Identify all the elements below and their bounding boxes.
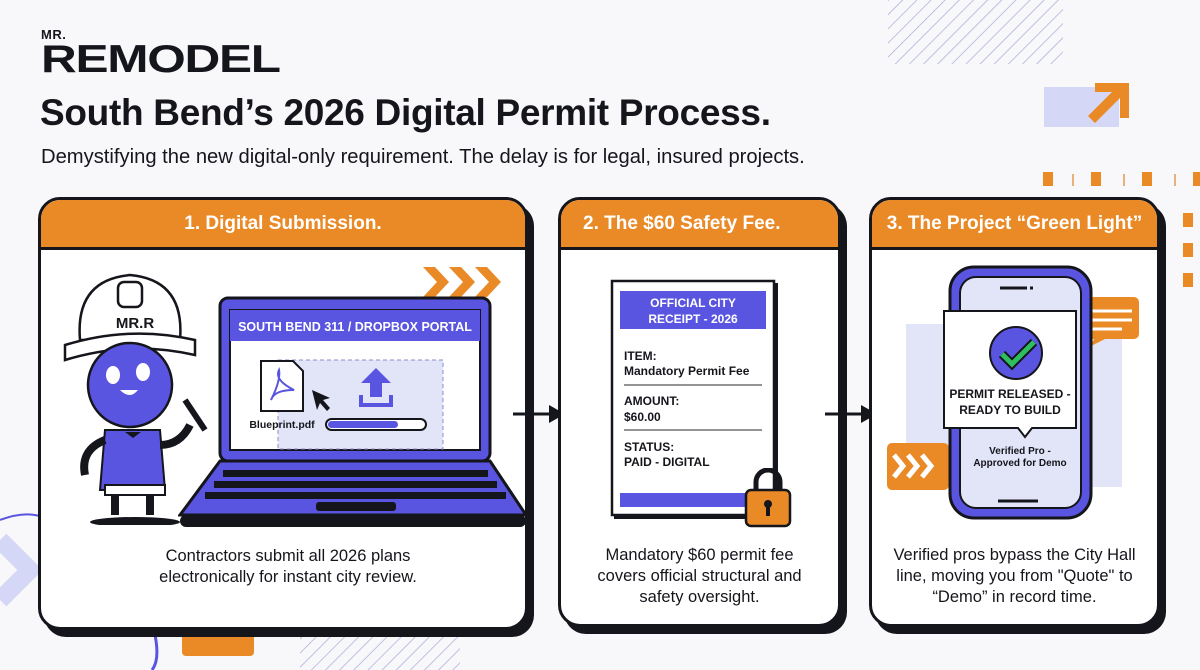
laptop: Blueprint.pdf	[249, 419, 315, 431]
heading 1	[41, 200, 525, 250]
heading 2	[561, 200, 838, 250]
receipt: STATUS:	[624, 440, 674, 454]
heading 1: 1. Digital Submission.	[184, 212, 382, 234]
receipt: OFFICIAL CITY	[650, 296, 736, 310]
receipt: $60.00	[624, 410, 661, 424]
panel: 3 green light	[869, 197, 1160, 627]
decoration: bottom left	[0, 513, 460, 670]
caption 2: covers official structural and	[597, 567, 802, 585]
logo: MR.	[41, 27, 66, 42]
caption 3	[893, 546, 1136, 606]
arrow 1	[513, 405, 558, 423]
phone illustration: PERMIT RELEASED -	[949, 387, 1071, 401]
caption 1	[159, 547, 417, 586]
caption 3: “Demo” in record time.	[932, 588, 1097, 606]
panel: 1 digital submission	[38, 197, 528, 630]
caption 2: Mandatory $60 permit fee	[605, 546, 794, 564]
title: South Bend’s 2026 Digital Permit Process.	[40, 92, 771, 133]
decoration: hatch top	[888, 0, 1063, 64]
receipt: PAID - DIGITAL	[624, 455, 710, 469]
decoration: dots	[1043, 172, 1200, 186]
phone illustration: Approved for Demo	[973, 458, 1067, 469]
heading 3: 3. The Project “Green Light”	[887, 212, 1142, 234]
receipt: RECEIPT - 2026	[648, 312, 738, 326]
caption 3: Verified pros bypass the City Hall	[893, 546, 1136, 564]
robot mascot: MR.R	[116, 315, 154, 332]
heading 2: 2. The $60 Safety Fee.	[583, 212, 780, 234]
caption 3: line, moving you from "Quote" to	[896, 567, 1133, 585]
panel: 2 safety fee	[558, 197, 841, 627]
phone illustration: Verified Pro -	[989, 446, 1051, 457]
laptop: SOUTH BEND 311 / DROPBOX PORTAL	[238, 320, 472, 334]
phone illustration	[887, 266, 1139, 520]
logo: REMODEL	[41, 38, 280, 81]
subtitle: Demystifying the new digital-only requirement. The delay is for legal, insured projects.	[41, 146, 805, 168]
receipt: Mandatory Permit Fee	[624, 364, 750, 378]
receipt: AMOUNT:	[624, 394, 679, 408]
caption 1: electronically for instant city review.	[159, 568, 417, 586]
receipt	[610, 280, 778, 519]
receipt: ITEM:	[624, 349, 657, 363]
heading 3	[872, 200, 1157, 250]
caption 1: Contractors submit all 2026 plans	[166, 547, 410, 565]
icon: padlock	[744, 468, 792, 528]
caption 2	[597, 546, 802, 606]
chevrons	[423, 267, 501, 297]
arrow 2	[825, 405, 869, 423]
caption 2: safety oversight.	[639, 588, 760, 606]
phone illustration: READY TO BUILD	[959, 403, 1061, 417]
laptop	[178, 296, 525, 527]
robot mascot	[64, 274, 208, 525]
decoration: arrow up-right	[1044, 83, 1129, 127]
